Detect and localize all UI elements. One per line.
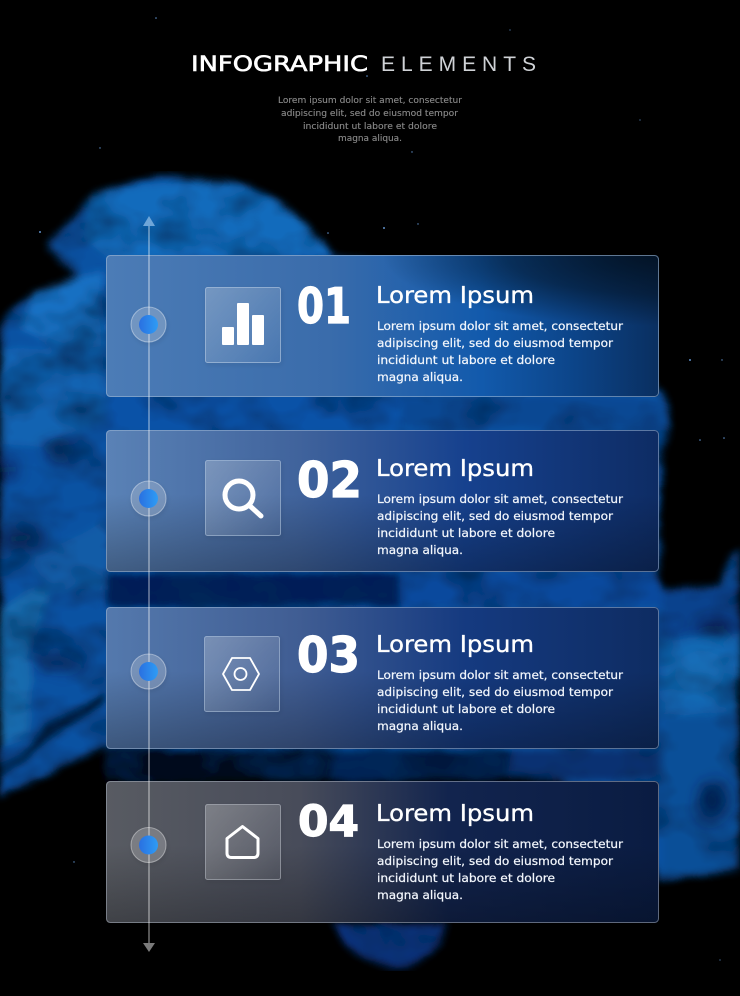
number 01: 01 [297, 278, 351, 335]
body text 3: adipiscing elit, sed do eiusmod tempor [377, 685, 613, 699]
body text 3: magna aliqua. [377, 719, 463, 733]
icon tile: bar chart [206, 288, 280, 362]
number 03: 03 [297, 627, 360, 684]
icon tile: magnifier [206, 460, 280, 536]
number 04: 04 [298, 797, 359, 847]
body text 4: magna aliqua. [377, 888, 463, 902]
heading 1: Lorem Ipsum [376, 283, 534, 309]
panel 1 [106, 255, 659, 397]
body text 4: incididunt ut labore et dolore [377, 871, 555, 885]
body text 2: Lorem ipsum dolor sit amet, consectetur [377, 492, 623, 506]
intro text: magna aliqua. [338, 134, 402, 144]
number 02: 02 [297, 452, 362, 509]
timeline arrow [143, 216, 155, 952]
body text 1: Lorem ipsum dolor sit amet, consectetur [377, 319, 623, 333]
title [191, 52, 536, 76]
body text 4: adipiscing elit, sed do eiusmod tempor [377, 854, 613, 868]
body text 4 [377, 837, 623, 902]
body text 1: incididunt ut labore et dolore [377, 353, 555, 367]
intro text: incididunt ut labore et dolore [303, 122, 437, 132]
body text 4: Lorem ipsum dolor sit amet, consectetur [377, 837, 623, 851]
body text 3 [377, 668, 623, 733]
heading 2: Lorem Ipsum [376, 456, 534, 482]
heading 4: Lorem Ipsum [376, 801, 534, 827]
body text 1: magna aliqua. [377, 370, 463, 384]
background: blue ink smoke [0, 177, 740, 966]
body text 3: incididunt ut labore et dolore [377, 702, 555, 716]
intro text: Lorem ipsum dolor sit amet, consectetur [278, 96, 462, 106]
body text 2: incididunt ut labore et dolore [377, 526, 555, 540]
title: INFOGRAPHIC [191, 52, 368, 76]
panel 4 [106, 781, 659, 923]
timeline node 3 [131, 654, 166, 689]
intro text: adipiscing elit, sed do eiusmod tempor [281, 109, 458, 119]
timeline node 4 [131, 828, 166, 862]
intro text [278, 96, 462, 144]
title: ELEMENTS [381, 53, 536, 76]
timeline node 1 [131, 307, 166, 342]
icon tile: hexagon nut [204, 636, 280, 712]
body text 2: magna aliqua. [377, 543, 463, 557]
body text 2 [377, 492, 623, 557]
heading 3: Lorem Ipsum [376, 632, 534, 658]
body text 3: Lorem ipsum dolor sit amet, consectetur [377, 668, 623, 682]
body text 2: adipiscing elit, sed do eiusmod tempor [377, 509, 613, 523]
timeline node 2 [131, 481, 166, 516]
body text 1: adipiscing elit, sed do eiusmod tempor [377, 336, 613, 350]
body text 1 [377, 319, 623, 384]
panel 3 [106, 607, 659, 749]
panel 2 [106, 430, 659, 572]
icon tile: house [206, 804, 280, 880]
